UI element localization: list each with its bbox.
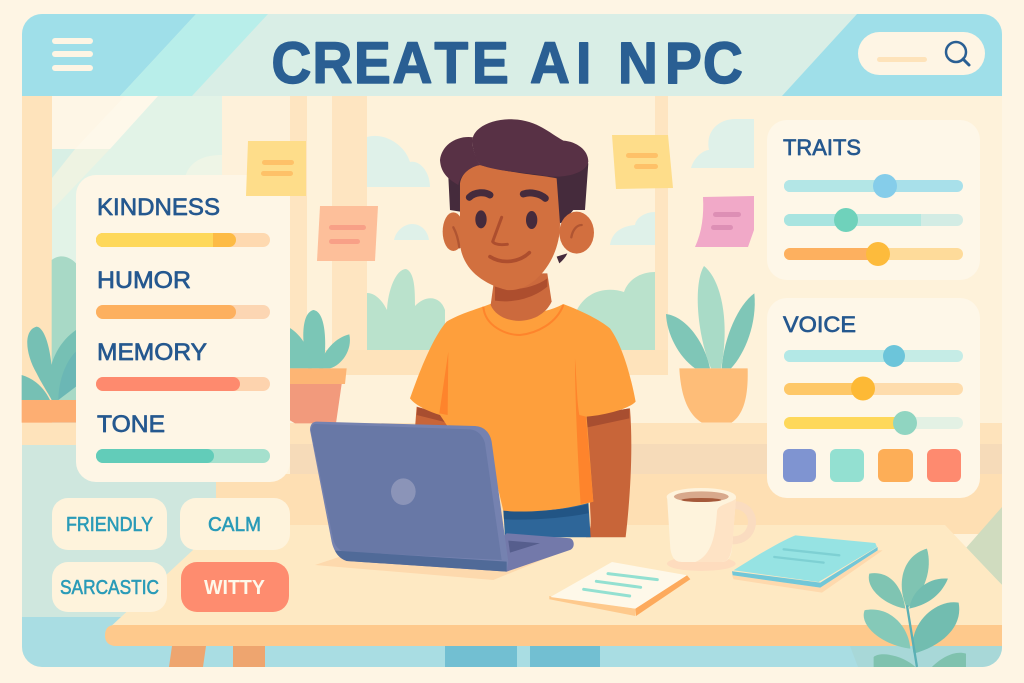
person xyxy=(410,119,636,537)
bar: kindness: KINDNESS xyxy=(97,194,220,221)
slider: trait three xyxy=(784,242,963,266)
chip: sarcastic xyxy=(52,562,167,612)
panel: voice: VOICE xyxy=(783,312,856,337)
chip: calm xyxy=(180,498,290,550)
laptop xyxy=(310,422,574,580)
bar: kindness xyxy=(96,194,270,247)
blue book xyxy=(732,535,883,593)
chip: witty: WITTY xyxy=(204,577,266,599)
bar: memory: MEMORY xyxy=(97,339,207,366)
tag chips xyxy=(52,498,290,612)
chip: friendly: FRIENDLY xyxy=(66,514,153,536)
title: CREATE xyxy=(272,31,509,95)
chip: friendly xyxy=(52,498,167,550)
chip: witty xyxy=(181,562,289,612)
icon: orange potted plant xyxy=(666,266,755,423)
slider: voice one xyxy=(784,345,963,367)
desk xyxy=(105,525,1002,667)
icon: hamburger menu xyxy=(52,38,93,71)
slider: trait one xyxy=(784,174,963,198)
slider: voice two xyxy=(784,376,963,400)
panel: voice xyxy=(767,298,980,498)
title: NPC xyxy=(618,31,743,95)
title: AI xyxy=(530,31,591,95)
title xyxy=(272,31,743,95)
slider: voice three xyxy=(784,411,963,435)
search box xyxy=(858,32,985,75)
bar: tone: TONE xyxy=(97,411,165,438)
coffee mug xyxy=(667,488,752,571)
panel: traits xyxy=(767,120,980,280)
notepad xyxy=(549,562,690,616)
chip: sarcastic: SARCASTIC xyxy=(60,577,159,599)
sticky note: pink xyxy=(695,196,754,247)
bar: humor: HUMOR xyxy=(97,267,191,294)
icon: terracotta potted plant xyxy=(287,310,350,423)
chip: calm: CALM xyxy=(208,514,261,536)
shirt and body xyxy=(410,303,636,537)
panel: traits: TRAITS xyxy=(783,135,861,160)
bar: humor xyxy=(96,267,270,319)
header bar xyxy=(22,14,1002,96)
colour swatches xyxy=(783,449,961,482)
sticky note: yellow right xyxy=(612,135,673,189)
bar: memory xyxy=(96,339,270,391)
sticky note: orange xyxy=(317,206,378,261)
slider: trait two xyxy=(784,208,963,232)
icon: left window plant xyxy=(22,256,76,423)
icon: foreground leaf plant xyxy=(864,549,966,667)
panel: personality bars xyxy=(76,175,290,482)
sticky note: yellow left xyxy=(246,141,306,196)
head xyxy=(440,119,594,321)
bar: tone xyxy=(96,411,270,463)
